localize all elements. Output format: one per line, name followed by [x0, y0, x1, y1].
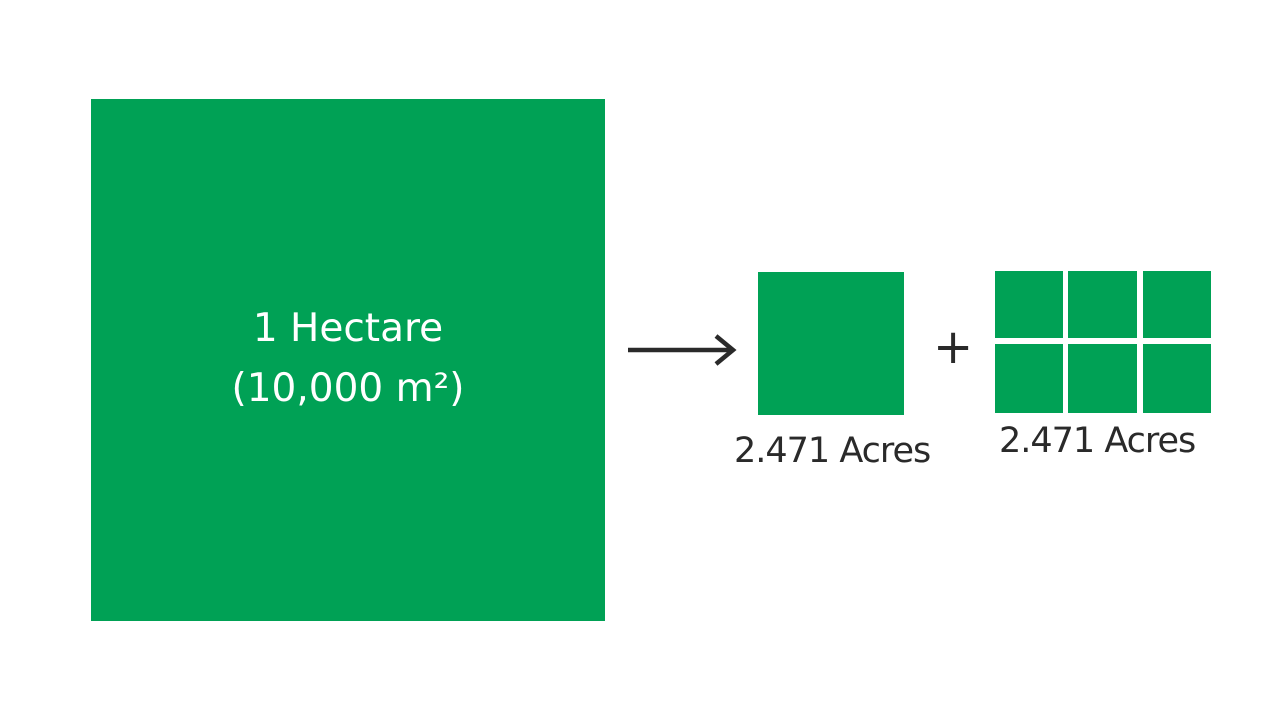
label: 2.471 Acres right: 2.471 Acres	[999, 421, 1195, 461]
label: 2.471 Acres left: 2.471 Acres	[734, 431, 930, 471]
grid of six squares	[995, 271, 1211, 413]
text: hectare label	[232, 306, 464, 411]
text: hectare label: (10,000 m²)	[232, 366, 464, 411]
arrow	[628, 334, 736, 366]
panel: hectare square	[91, 99, 605, 621]
small acre square	[758, 272, 904, 415]
text: hectare label: 1 Hectare	[253, 306, 443, 351]
plus sign: +	[933, 319, 973, 375]
